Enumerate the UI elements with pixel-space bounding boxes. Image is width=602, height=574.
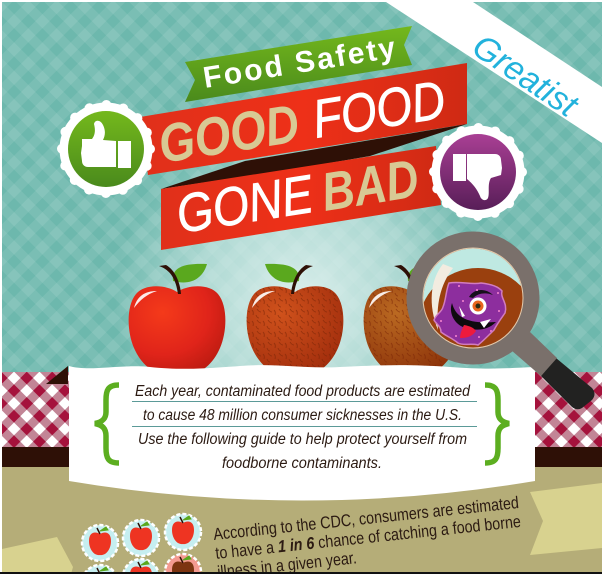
magnifying glass with germ monster [415,240,594,409]
divider rules [132,402,477,426]
bottom edge line [0,572,602,574]
background: teal plaid [2,2,602,374]
apple: fresh [129,264,225,374]
intro text [135,383,471,472]
icon: thumbs down badge [432,126,524,218]
tablecloth: gingham [2,372,602,467]
handle: black grip [541,358,594,409]
apple icon grid: 1 in 6 [82,514,201,574]
corner banner: Greatist: Greatist [466,27,586,125]
title ribbon: Good Food: FOOD [308,70,449,150]
right brace [485,385,509,463]
ribbon fold shadow [161,124,467,189]
icon: thumbs up badge [60,102,152,196]
pale ribbon: left [2,537,73,574]
card folds [46,366,68,384]
apple: starting to spoil [247,264,343,374]
intro text: to cause 48 million consumer sicknesses in the U.S. [143,407,462,424]
intro text: foodborne contaminants. [222,455,382,472]
statistic text: 1 in 6 chance: According to the CDC, consumers are estimated [212,493,520,544]
title ribbon: Good Food: GOOD [154,94,303,175]
intro card [69,365,535,500]
title ribbon: Gone Bad: BAD [317,148,423,223]
title ribbon: Gone Bad: GONE [172,164,318,245]
intro text: Use the following guide to help protect yourself from [138,431,467,448]
pale ribbon: right [530,483,602,555]
statistic text: 1 in 6 chance: to have a 1 in 6 chance of catching a food borne [214,512,522,563]
germ monster [434,282,506,345]
title ribbon: Good Food [140,63,467,175]
title ribbon: Gone Bad [161,146,441,250]
lens ring [415,240,531,356]
title ribbon: Food Safety: Food Safety [201,31,398,95]
corner banner: Greatist [386,2,602,143]
statistic text: 1 in 6 chance [212,493,524,574]
intro text: Each year, contaminated food products are estimated [135,383,471,400]
left brace [95,385,119,463]
apple: rotten [364,265,448,366]
lower panel background [2,467,602,573]
lens contents [424,248,522,348]
handle: grey neck [511,332,557,376]
